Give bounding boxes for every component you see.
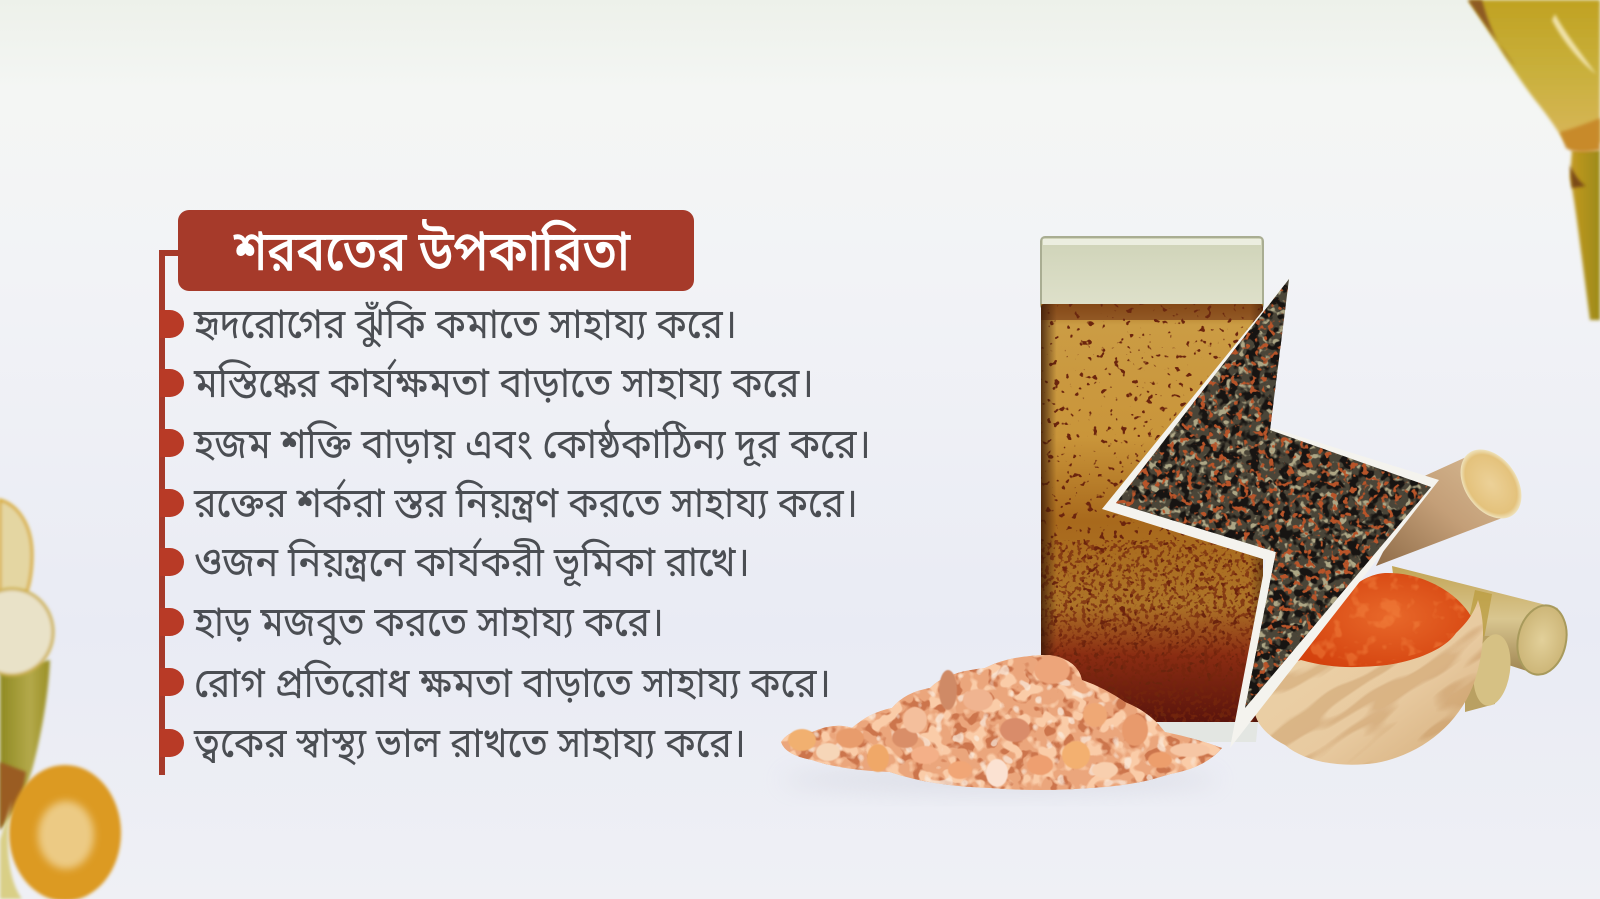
benefit 8: ত্বকের স্বাস্থ্য ভাল রাখতে সাহায্য করে। [193, 719, 746, 775]
empty glass top [1041, 237, 1263, 309]
jaggery [1290, 573, 1472, 671]
orange slice [9, 765, 121, 899]
small cane end [1465, 636, 1495, 712]
glass base [1044, 722, 1258, 742]
wooden bowl with jaggery [1256, 573, 1483, 765]
glass of sharbat [1041, 237, 1263, 742]
benefit 6: হাড় মজবুত করতে সাহায্য করে। [193, 598, 664, 654]
sugarcane left edge [0, 500, 121, 899]
shadow under objects [780, 768, 1220, 792]
heading: শরবতের উপকারিতা [233, 220, 631, 293]
salt pile [775, 650, 1225, 795]
seed mix texture [1116, 279, 1428, 708]
lower cane [1392, 566, 1558, 672]
lightning bolt seed panel [1100, 275, 1440, 750]
benefit 4: রক্তের শর্করা স্তর নিয়ন্ত্রণ করতে সাহায্য করে। [193, 478, 858, 535]
brown node [0, 762, 26, 830]
cane body [0, 660, 50, 830]
cane cut cap [0, 589, 53, 675]
benefit 1: হৃদরোগের ঝুঁকি কমাতে সাহায্য করে। [193, 300, 737, 356]
panel: benefits list [159, 210, 871, 775]
sugarcane top right [1468, 0, 1600, 320]
liquid [1041, 304, 1263, 722]
upper cane [1376, 453, 1510, 566]
benefit 3: হজম শক্তি বাড়ায় এবং কোষ্ঠকাঠিন্য দূর করে। [193, 419, 871, 476]
benefit 7: রোগ প্রতিরোধ ক্ষমতা বাড়াতে সাহায্য করে। [194, 659, 831, 715]
white bolt border [1102, 277, 1439, 748]
bowl [1255, 600, 1483, 765]
cane stub upper [0, 500, 32, 600]
benefit 5: ওজন নিয়ন্ত্রনে কার্যকরী ভূমিকা রাখে। [194, 537, 750, 594]
salt crystals [788, 656, 1210, 787]
seeds [1041, 304, 1263, 722]
benefit 2: মস্তিষ্কের কার্যক্ষমতা বাড়াতে সাহায্য করে। [193, 358, 814, 415]
timeline bar [159, 250, 180, 775]
bullets [160, 310, 184, 757]
sugarcane pieces [1376, 438, 1573, 712]
